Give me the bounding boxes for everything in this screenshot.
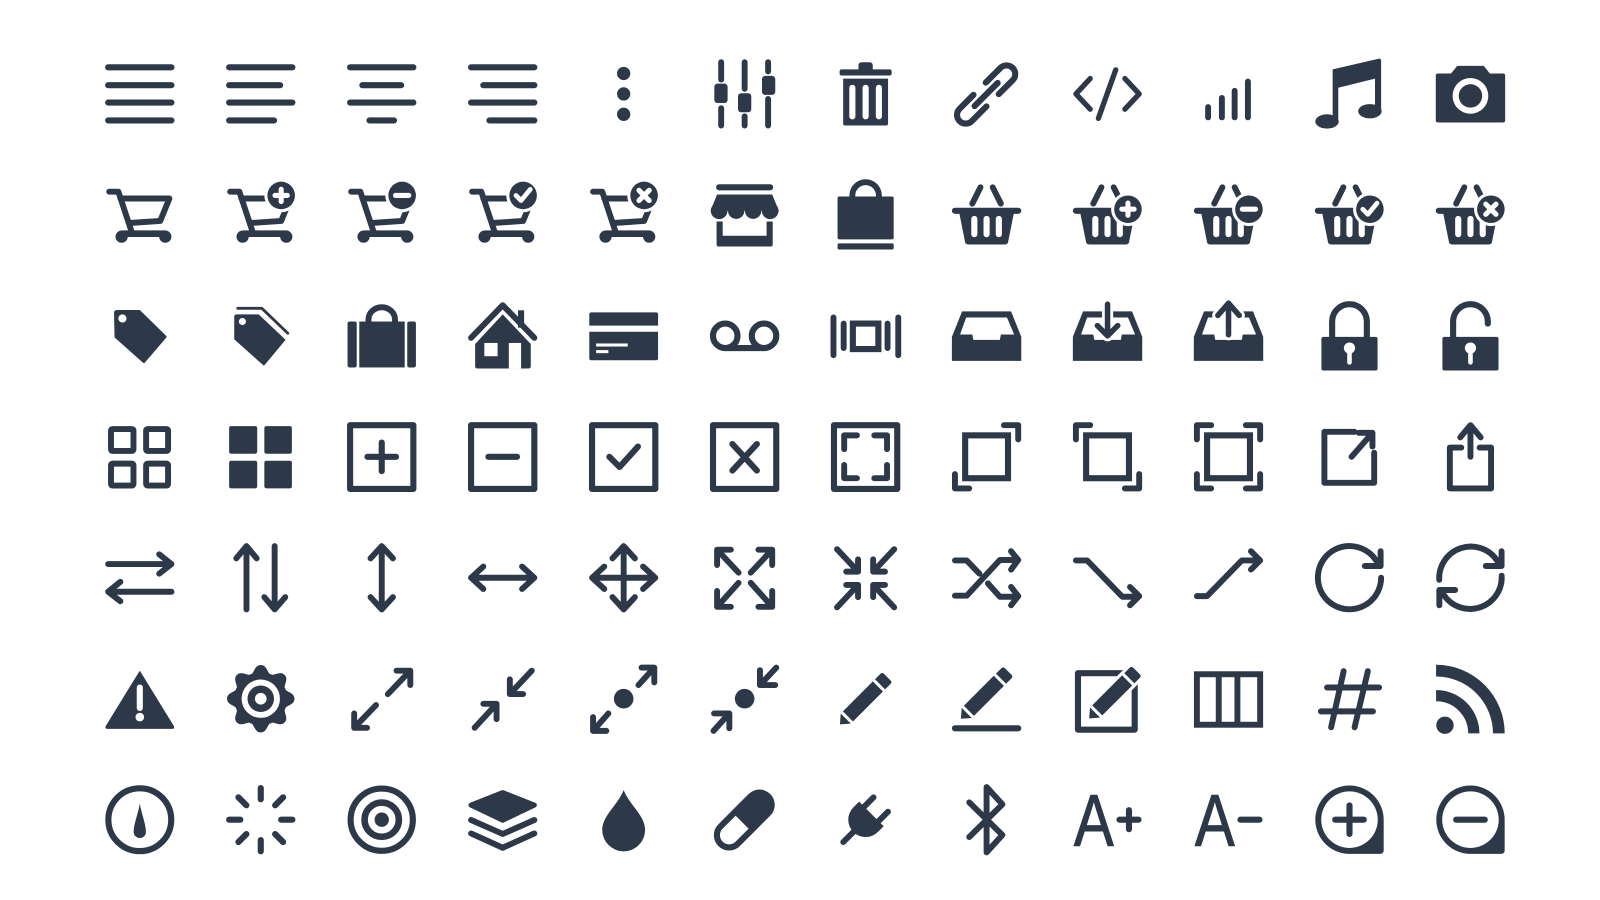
icon: box minus bbox=[471, 425, 534, 489]
icon: target bbox=[351, 789, 413, 851]
icon: sliders bbox=[714, 62, 775, 126]
icon: swap horizontal bbox=[108, 554, 171, 601]
icon: vertical arrow bbox=[371, 546, 393, 609]
row 5: arrow icons bbox=[108, 546, 1502, 609]
row 7: misc and zoom icons bbox=[108, 779, 1505, 862]
icon: house bbox=[471, 305, 534, 368]
icon: tag bbox=[115, 311, 165, 362]
icon: sync bbox=[1439, 547, 1502, 609]
icon: shopping bag bbox=[838, 182, 894, 250]
icon: barcode frame bbox=[833, 317, 898, 355]
icon: box cross bbox=[713, 425, 776, 489]
icon: cart check bbox=[472, 179, 540, 243]
icon: font size decrease: A bbox=[1195, 779, 1235, 862]
icon: power plug bbox=[831, 792, 893, 854]
icon: basket bbox=[955, 187, 1018, 244]
icon: signal bars bbox=[1208, 82, 1248, 117]
icon: box check bbox=[592, 425, 655, 489]
icon: basket add bbox=[1076, 187, 1145, 244]
icon: cart add bbox=[230, 179, 298, 243]
icon: spinner bbox=[229, 788, 292, 851]
icon: padlock closed bbox=[1321, 304, 1378, 371]
icon: double tag bbox=[235, 308, 288, 364]
icon: pencil with underline bbox=[955, 666, 1018, 728]
icon: cart bbox=[109, 192, 171, 243]
icon: gear bbox=[227, 665, 294, 732]
icon: hash bbox=[1321, 671, 1379, 727]
icon: share upload bbox=[1450, 425, 1491, 488]
icon: external link bbox=[1324, 432, 1374, 483]
icon: frame resize top-right bottom-left bbox=[955, 425, 1018, 488]
icon: gauge bbox=[108, 788, 171, 851]
icon: justify lines bbox=[108, 67, 171, 120]
icon: frame all corners bbox=[1197, 425, 1260, 488]
icon: compress to dot bbox=[714, 668, 776, 731]
icon: frame resize top-left bottom-right bbox=[1076, 425, 1139, 488]
icon: align right bbox=[471, 67, 534, 120]
icon: vertical dots bbox=[617, 67, 630, 121]
icon: padlock open bbox=[1442, 304, 1499, 371]
icon: cart cancel bbox=[593, 179, 661, 243]
row 4: box and frame icons bbox=[111, 425, 1491, 489]
icon: horizontal arrow bbox=[471, 567, 534, 589]
icon: grid outline bbox=[111, 429, 168, 486]
icon: expand four arrows bbox=[717, 550, 772, 607]
icon: chain link bbox=[953, 62, 1019, 127]
icon: move bbox=[592, 546, 655, 609]
icon: align left bbox=[229, 67, 292, 120]
icon: refresh bbox=[1318, 546, 1381, 609]
icon: tray download bbox=[1073, 304, 1142, 361]
icon: pencil bbox=[835, 672, 892, 729]
icon: code brackets bbox=[1076, 70, 1139, 118]
icon: font size increase: A bbox=[1074, 779, 1114, 862]
icon: compress four arrows bbox=[837, 549, 894, 607]
icon: tray upload bbox=[1194, 303, 1263, 361]
icon: inbox tray bbox=[952, 311, 1021, 361]
icon: suitcase bbox=[348, 307, 416, 367]
icon: rss feed bbox=[1436, 671, 1499, 734]
icon: cart remove bbox=[351, 179, 419, 243]
icon: credit card bbox=[589, 312, 658, 360]
icon: swap vertical bbox=[236, 546, 285, 609]
icon: basket check bbox=[1318, 187, 1387, 244]
row 2: shopping icons bbox=[109, 179, 1508, 250]
icon: warning triangle bbox=[105, 671, 174, 729]
icon: align center bbox=[350, 67, 413, 120]
icon: voicemail bbox=[713, 324, 776, 348]
icon: box fullscreen bbox=[834, 425, 897, 489]
icon: trend down bbox=[1076, 560, 1139, 605]
icon: zoom in bbox=[1315, 786, 1384, 854]
icon: zoom out bbox=[1436, 786, 1505, 854]
icon: expand diagonal bbox=[354, 671, 410, 728]
icon: capsule pill bbox=[710, 783, 781, 855]
icon: storefront bbox=[710, 187, 779, 246]
icon: layers bbox=[471, 793, 534, 848]
icon: box plus bbox=[350, 425, 413, 489]
icon: expand from dot bbox=[593, 668, 654, 731]
icon: edit note bbox=[1078, 657, 1151, 730]
icon: shuffle bbox=[955, 551, 1018, 605]
icon: basket remove bbox=[1197, 187, 1266, 244]
icon: camera bbox=[1436, 66, 1505, 122]
icon: trend up bbox=[1197, 551, 1260, 596]
icon: water drop bbox=[602, 790, 645, 851]
icon: trash can bbox=[840, 62, 892, 126]
icon: bluetooth bbox=[969, 787, 1002, 852]
row 6: alert, settings and edit icons bbox=[105, 657, 1499, 734]
row 1: text and tools icons bbox=[108, 59, 1505, 129]
icon: grid solid bbox=[229, 426, 292, 488]
icon: compress diagonal bbox=[475, 671, 532, 728]
row 3: objects and storage icons bbox=[115, 303, 1499, 371]
icon: three columns bbox=[1197, 674, 1260, 725]
icon: basket cancel bbox=[1439, 187, 1508, 244]
icon: music note bbox=[1315, 59, 1382, 129]
